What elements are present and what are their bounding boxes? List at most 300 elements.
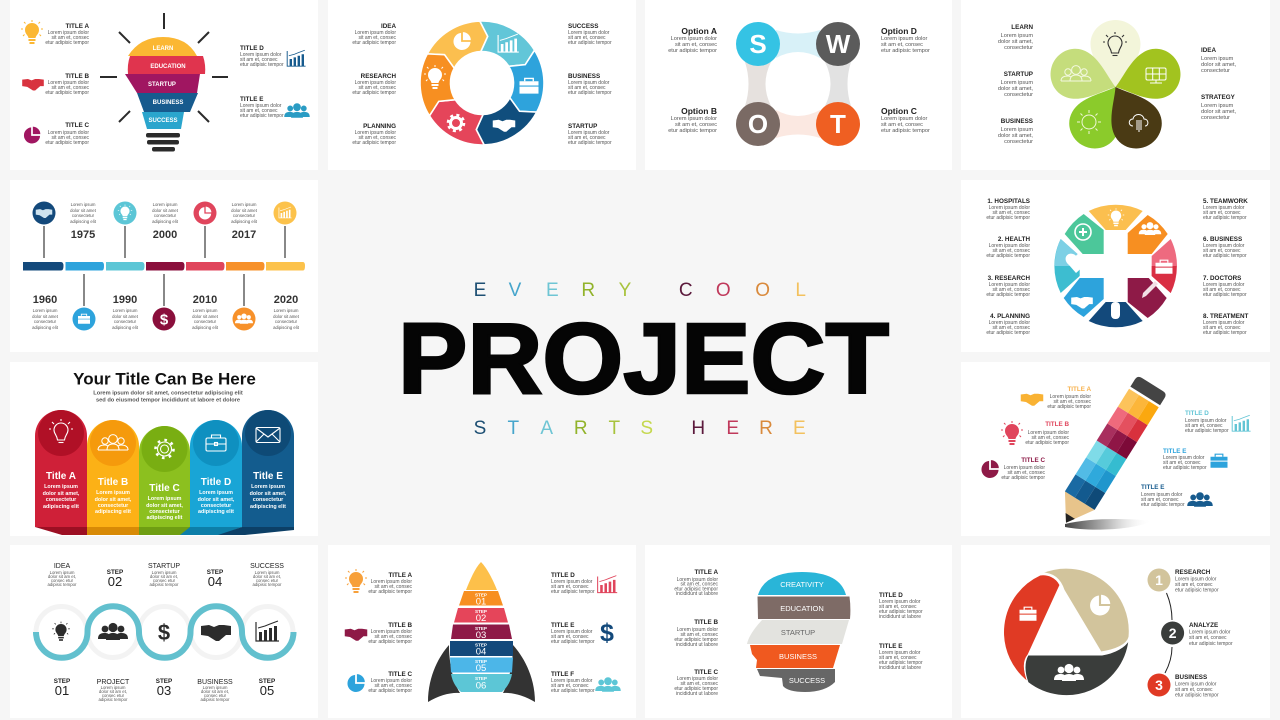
icon: bar chart — [287, 50, 306, 66]
rocket stage 05: STEP — [475, 659, 487, 664]
label: title D: Lorem ipsum dolor — [1185, 418, 1227, 424]
year 1975: 1975 — [71, 229, 95, 241]
column: title D: Title D — [201, 477, 231, 488]
label: title B: incididunt ut labore — [676, 642, 718, 648]
teal wave — [36, 606, 294, 658]
label: title E — [1163, 448, 1207, 471]
label: title A: etur adipisic tempor — [1047, 404, 1091, 410]
label: title B: etur adipisic tempor — [368, 639, 412, 645]
label: business: BUSINESS — [1175, 674, 1207, 681]
label: 8. treatment: etur adipisic tempor — [1203, 330, 1247, 336]
swirl segment: dark — [1025, 640, 1129, 696]
head band: creativity — [758, 572, 846, 595]
label: option B: Option B — [681, 106, 717, 116]
label: 4. planning: Lorem ipsum dolor — [989, 320, 1030, 326]
label: business — [568, 73, 612, 96]
bulb band: success: SUCCESS — [148, 118, 178, 124]
label: title D — [240, 45, 284, 68]
label: 8. treatment: sit am et, consec — [1203, 325, 1241, 331]
label: research: sit am et, consec — [1175, 582, 1213, 588]
label: title D: TITLE D — [879, 592, 903, 599]
year 2010: dolor sit amet — [192, 314, 219, 319]
label: title D: incididunt ut labore — [879, 614, 921, 620]
label: title A — [45, 23, 89, 46]
column: title C: Lorem ipsum — [148, 496, 182, 502]
label: title B: TITLE B — [1045, 421, 1069, 428]
label: title A: etur adipisic tempor — [45, 40, 89, 46]
label: title E — [551, 622, 595, 645]
label: 3. research: Lorem ipsum dolor — [989, 282, 1030, 288]
label: business: etur adipisic tempor — [1175, 692, 1219, 698]
label: success: dolor sit am et, — [253, 574, 281, 579]
bulb band: learn: LEARN — [153, 46, 173, 52]
label: option A: Lorem ipsum dolor — [671, 36, 717, 42]
label: title E: etur adipisic tempor — [551, 639, 595, 645]
panel: rocket — [328, 545, 636, 718]
step 02: STEP — [107, 569, 123, 576]
icon: pie — [347, 674, 365, 692]
number 3 — [1148, 674, 1170, 696]
label: startup: etur adipisic tempor — [568, 140, 612, 146]
label: idea: Lorem ipsum dolor — [355, 30, 396, 36]
icon: dollar: $ — [600, 619, 614, 647]
SWOT circle W — [816, 22, 860, 66]
label: title D: sit am et, consec — [551, 584, 589, 590]
label: title C: TITLE C — [1021, 457, 1045, 464]
label: business — [998, 118, 1033, 145]
panel: timeline — [10, 180, 318, 352]
label: analyze: etur adipisic tempor — [1189, 641, 1233, 647]
label: title B — [45, 73, 89, 96]
label: business: Lorem ipsum dolor — [1175, 682, 1217, 688]
label: business: dolor sit am et, — [201, 689, 229, 694]
label: planning: PLANNING — [363, 123, 396, 130]
label: analyze — [1189, 622, 1233, 647]
label: business: consec etur — [204, 693, 227, 698]
SWOT circle T — [816, 102, 860, 146]
label: option B — [668, 106, 717, 134]
label: title B: etur adipisic tempor — [1025, 440, 1069, 446]
label: research: etur adipisic tempor — [1175, 588, 1219, 594]
label: learn: Lorem ipsum — [1001, 33, 1033, 39]
label: title D: TITLE D — [551, 572, 575, 579]
label: idea — [352, 23, 396, 46]
label: title D: TITLE D — [240, 45, 264, 52]
label: strategy — [1201, 94, 1237, 121]
step 01 — [54, 678, 70, 698]
panel: five columns — [10, 362, 318, 536]
label: analyze: ANALYZE — [1189, 622, 1218, 629]
rocket stage 03: STEP — [475, 626, 487, 631]
step 05 — [259, 678, 275, 698]
label: startup: dolor sit amet, — [998, 86, 1033, 92]
step 03: 03 — [157, 683, 171, 698]
label: business: sit am et, consec — [568, 85, 606, 91]
label: title E: Lorem ipsum dolor — [240, 103, 282, 109]
bulb band: success — [142, 112, 184, 129]
icon: chart — [598, 576, 617, 593]
label: 4. planning: etur adipisic tempor — [986, 330, 1030, 336]
icon: handshake — [22, 79, 44, 90]
label: title A: Lorem ipsum dolor — [48, 30, 89, 36]
rocket stage 04: 04 — [476, 646, 486, 658]
step 03 — [156, 678, 172, 698]
label: title C: Lorem ipsum dolor — [371, 678, 412, 684]
label: title C: TITLE C — [694, 669, 718, 676]
label: option C — [881, 106, 930, 134]
label: title C: etur adipisic tempor — [674, 686, 718, 692]
label: planning: etur adipisic tempor — [352, 140, 396, 146]
label: startup: STARTUP — [1004, 71, 1033, 78]
step 05: STEP — [259, 678, 275, 685]
label: 7. doctors: Lorem ipsum dolor — [1203, 282, 1245, 288]
year 2020: consectetur — [275, 319, 298, 324]
column: title B: adipiscing elit — [95, 509, 131, 515]
label: project: adipisic tempor — [99, 697, 128, 702]
label: title F: Lorem ipsum dolor — [551, 678, 593, 684]
label: 2. health: 2. HEALTH — [998, 236, 1030, 243]
SWOT circle O: O — [748, 109, 768, 139]
year 1990: dolor sit amet — [112, 314, 139, 319]
year 2020: dolor sit amet — [273, 314, 300, 319]
column: title A: adipiscing elit — [43, 504, 79, 510]
label: title B: TITLE B — [388, 622, 412, 629]
label: success: Lorem ipsum — [255, 570, 280, 575]
label: option D: etur adipisic tempor — [881, 48, 930, 54]
label: title A: etur adipisic tempor — [674, 586, 718, 592]
icon: briefcase — [1210, 454, 1228, 468]
label: title A: sit am et, consec — [51, 35, 89, 41]
rocket stage 03 — [451, 624, 512, 641]
label: planning: sit am et, consec — [358, 135, 396, 141]
label: strategy: consectetur — [1201, 115, 1230, 121]
label: title B: etur adipisic tempor — [674, 637, 718, 643]
panel: step wave — [10, 545, 318, 718]
label: option C: etur adipisic tempor — [881, 128, 930, 134]
icon: people — [284, 103, 310, 118]
label: title D: Lorem ipsum dolor — [879, 599, 921, 605]
label: title E: sit am et, consec — [879, 655, 917, 661]
label: idea: IDEA — [381, 23, 396, 30]
label: title D: TITLE D — [1185, 410, 1209, 417]
column: title C — [139, 426, 190, 527]
head band: business: BUSINESS — [779, 652, 817, 661]
label: research: sit am et, consec — [358, 85, 396, 91]
pencil — [1051, 375, 1167, 532]
label: business: sit am et, consec — [1175, 687, 1213, 693]
label: title F: TITLE F — [551, 671, 574, 678]
column: title C: consectetur — [149, 509, 181, 515]
head band: creativity: CREATIVITY — [780, 580, 824, 589]
label: learn — [998, 24, 1033, 51]
label: title B — [368, 622, 412, 645]
year 2020: adipiscing elit — [273, 325, 300, 330]
SWOT circle S — [736, 22, 780, 66]
label: success — [250, 563, 284, 587]
step 02: 02 — [108, 574, 122, 589]
step 03: STEP — [156, 678, 172, 685]
ring of eight segments — [1054, 205, 1177, 327]
label: title B — [1025, 421, 1069, 446]
label: title A — [674, 569, 718, 597]
label: title C: sit am et, consec — [680, 681, 718, 687]
label: 2. health: sit am et, consec — [992, 248, 1030, 254]
label: business: consectetur — [1004, 139, 1033, 145]
label: title A: etur adipisic tempor — [368, 589, 412, 595]
label: strategy: STRATEGY — [1201, 94, 1236, 101]
label: title C: incididunt ut labore — [676, 691, 718, 697]
label: option B: sit am et, consec — [675, 122, 717, 128]
year 2020: 2020 — [274, 294, 298, 306]
label: 1. hospitals: Lorem ipsum dolor — [989, 205, 1030, 211]
rocket stage 06: 06 — [476, 680, 486, 692]
label: business: etur adipisic tempor — [568, 90, 612, 96]
timeline icons upper — [32, 202, 296, 224]
column: title B: dolor sit amet, — [95, 497, 132, 503]
label: title E: sit am et, consec — [1163, 460, 1201, 466]
label: 3. research — [986, 275, 1030, 298]
label: title C: sit am et, consec — [1007, 470, 1045, 476]
year 2017: consectetur — [233, 213, 256, 218]
label: title E navy: etur adipisic tempor — [1141, 502, 1185, 508]
column: title D: consectetur — [201, 503, 232, 509]
number 3: 3 — [1155, 677, 1163, 693]
column: title D: Lorem ipsum — [199, 490, 233, 496]
label: research: RESEARCH — [361, 73, 396, 80]
label: business: Lorem ipsum dolor — [568, 80, 610, 86]
label: title A: TITLE A — [65, 23, 89, 30]
label: title B: etur adipisic tempor — [45, 90, 89, 96]
year 2000: 2000 — [153, 229, 177, 241]
label: startup: Lorem ipsum — [152, 570, 177, 575]
rocket stage 01 — [459, 591, 503, 608]
column: title E — [242, 410, 294, 527]
year 1975: consectetur — [72, 213, 95, 218]
step 04 — [207, 569, 223, 589]
label: title C: sit am et, consec — [374, 683, 412, 689]
column: title B — [87, 420, 139, 527]
label: title E navy: TITLE E — [1141, 484, 1164, 491]
label: idea: adipisic tempor — [48, 582, 77, 587]
label: idea: dolor sit amet, — [1201, 62, 1237, 68]
year 1990: consectetur — [114, 319, 137, 324]
label: 6. business: sit am et, consec — [1203, 248, 1241, 254]
year 2000: dolor sit amet — [152, 208, 179, 213]
swirl icons — [1020, 595, 1110, 681]
label: title C: Lorem ipsum dolor — [1004, 465, 1045, 471]
label: title B — [674, 619, 718, 648]
petal icons — [1061, 32, 1166, 134]
label: title B: TITLE B — [694, 619, 718, 626]
label: title D — [879, 592, 923, 620]
timeline bar — [23, 262, 305, 270]
column: title B: consectetur — [98, 503, 129, 509]
column: title E: dolor sit amet, — [250, 491, 287, 497]
label: title A: sit am et, consec — [680, 582, 718, 588]
column: title E: adipiscing elit — [250, 504, 286, 510]
label: success: SUCCESS — [250, 563, 284, 570]
head band: success: SUCCESS — [789, 676, 825, 685]
label: analyze: sit am et, consec — [1189, 635, 1227, 641]
label: option A: sit am et, consec — [675, 42, 717, 48]
label: title B: sit am et, consec — [374, 634, 412, 640]
label: title E: TITLE E — [879, 643, 902, 650]
label: success: consec etur — [256, 578, 279, 583]
label: startup: dolor sit am et, — [150, 574, 178, 579]
rocket stage 04 — [450, 641, 513, 658]
label: option A: etur adipisic tempor — [668, 48, 717, 54]
number 2: 2 — [1169, 625, 1177, 641]
label: option D: Lorem ipsum dolor — [881, 36, 927, 42]
icon: pie chart — [24, 127, 40, 143]
rocket fins — [428, 645, 535, 702]
icon: chart — [1232, 415, 1251, 431]
column: title E: consectetur — [253, 497, 284, 503]
year 2017 — [231, 202, 258, 241]
label: startup: consec etur — [153, 578, 176, 583]
label: option A — [668, 26, 717, 54]
label: project: consec etur — [102, 693, 125, 698]
year 2010: 2010 — [193, 294, 217, 306]
bulb band: startup — [125, 74, 200, 93]
label: startup — [998, 71, 1033, 98]
column folds — [35, 527, 294, 535]
lightbulb rays — [100, 13, 228, 122]
label: idea — [48, 563, 77, 587]
label: title B: Lorem ipsum dolor — [677, 627, 718, 633]
column: title D: adipiscing elit — [198, 509, 234, 515]
label: title C: TITLE C — [388, 671, 412, 678]
label: 5. teamwork: sit am et, consec — [1203, 210, 1241, 216]
rocket stage 02: 02 — [476, 613, 486, 624]
label: title A: incididunt ut labore — [676, 591, 718, 597]
panel: head — [645, 545, 952, 718]
label: 7. doctors: etur adipisic tempor — [1203, 292, 1247, 298]
label: 7. doctors: sit am et, consec — [1203, 287, 1241, 293]
label: title F: etur adipisic tempor — [551, 688, 595, 694]
icon: handshake — [1021, 394, 1043, 406]
label: title A: Lorem ipsum dolor — [677, 577, 718, 583]
label: title F: sit am et, consec — [551, 683, 589, 689]
label: title E: Lorem ipsum dolor — [879, 650, 921, 656]
label: title B: sit am et, consec — [680, 632, 718, 638]
bulb band: education: EDUCATION — [150, 64, 186, 70]
step connector arcs — [1165, 593, 1172, 673]
year 1990 — [112, 294, 139, 330]
number 2 — [1161, 622, 1184, 644]
head band: success — [757, 669, 835, 692]
label: business — [197, 679, 233, 702]
label: startup: STARTUP — [148, 563, 180, 570]
label: project — [97, 679, 130, 702]
year 1960: dolor sit amet — [32, 314, 59, 319]
label: 8. treatment: Lorem ipsum dolor — [1203, 320, 1245, 326]
label: title C — [674, 669, 718, 697]
label: title D: etur adipisic tempor — [879, 609, 923, 615]
swirl segment: tan — [1042, 568, 1129, 652]
label: title A: TITLE A — [388, 572, 412, 579]
icon: bulb — [1001, 421, 1023, 445]
year 1990: adipiscing elit — [112, 325, 139, 330]
label: title C: etur adipisic tempor — [368, 688, 412, 694]
label: learn: consectetur — [1004, 45, 1033, 51]
label: analyze: Lorem ipsum dolor — [1189, 630, 1231, 636]
bulb band: learn — [128, 37, 197, 56]
label: success: Lorem ipsum dolor — [568, 30, 610, 36]
SWOT circle W: W — [826, 29, 851, 59]
rocket stage 05 — [450, 658, 513, 674]
rocket stage 06 — [451, 674, 512, 692]
label: research — [1175, 569, 1219, 594]
label: 5. teamwork: Lorem ipsum dolor — [1203, 205, 1245, 211]
label: title B: TITLE B — [65, 73, 89, 80]
label: idea: dolor sit am et, — [48, 574, 76, 579]
year 2017: dolor sit amet — [231, 208, 258, 213]
center headline: every cool: E V E R Y C O O L — [474, 280, 806, 301]
label: 2. health: Lorem ipsum dolor — [989, 243, 1030, 249]
label: 6. business: 6. BUSINESS — [1203, 236, 1242, 243]
year 2010: consectetur — [194, 319, 217, 324]
label: title C: etur adipisic tempor — [45, 140, 89, 146]
column: title E: Title E — [253, 471, 283, 482]
year 1960: 1960 — [33, 294, 57, 306]
year 1960 — [32, 294, 59, 330]
step 04: 04 — [208, 574, 222, 589]
label: research: Lorem ipsum dolor — [1175, 576, 1217, 582]
number 1 — [1148, 568, 1170, 592]
label: title A: TITLE A — [694, 569, 718, 576]
label: project: PROJECT — [97, 679, 130, 686]
heading: Your Title Can Be Here — [73, 370, 256, 388]
label: option B: Lorem ipsum dolor — [671, 116, 717, 122]
year 2000: consectetur — [154, 213, 177, 218]
icon: people — [1187, 492, 1213, 507]
year 2020 — [273, 294, 300, 330]
column: title D — [190, 420, 242, 527]
column: title C: adipiscing elit — [147, 515, 183, 521]
label: title B: sit am et, consec — [51, 85, 89, 91]
subtitle — [93, 390, 243, 404]
label: idea: etur adipisic tempor — [352, 40, 396, 46]
year 2010 — [192, 294, 219, 330]
year 1975: Lorem ipsum — [71, 202, 96, 207]
column: title A: Lorem ipsum — [44, 484, 78, 490]
label: 1. hospitals: etur adipisic tempor — [986, 215, 1030, 221]
label: title E: sit am et, consec — [551, 634, 589, 640]
label: 3. research: sit am et, consec — [992, 287, 1030, 293]
label: 1. hospitals: 1. HOSPITALS — [987, 198, 1030, 205]
label: title C — [368, 671, 412, 694]
label: 8. treatment — [1203, 313, 1249, 336]
label: startup: Lorem ipsum — [1001, 80, 1033, 86]
label: strategy: dolor sit amet, — [1201, 109, 1237, 115]
timeline icons lower: $ — [160, 312, 169, 328]
label: 4. planning: sit am et, consec — [992, 325, 1030, 331]
label: title B: Lorem ipsum dolor — [371, 629, 412, 635]
label: option C: Option C — [881, 106, 917, 116]
head band: business — [750, 645, 840, 668]
bulb band: business: BUSINESS — [153, 100, 183, 106]
year 1960: adipiscing elit — [32, 325, 59, 330]
column: title A — [35, 410, 87, 527]
center headline: project: PROJECT — [398, 303, 889, 415]
label: title E navy: Lorem ipsum dolor — [1141, 492, 1183, 498]
label: title D: sit am et, consec — [879, 604, 917, 610]
panel: triangle cycle — [961, 545, 1270, 718]
label: title E: etur adipisic tempor — [879, 660, 923, 666]
label: title E: etur adipisic tempor — [1163, 465, 1207, 471]
label: title E: sit am et, consec — [240, 108, 278, 114]
